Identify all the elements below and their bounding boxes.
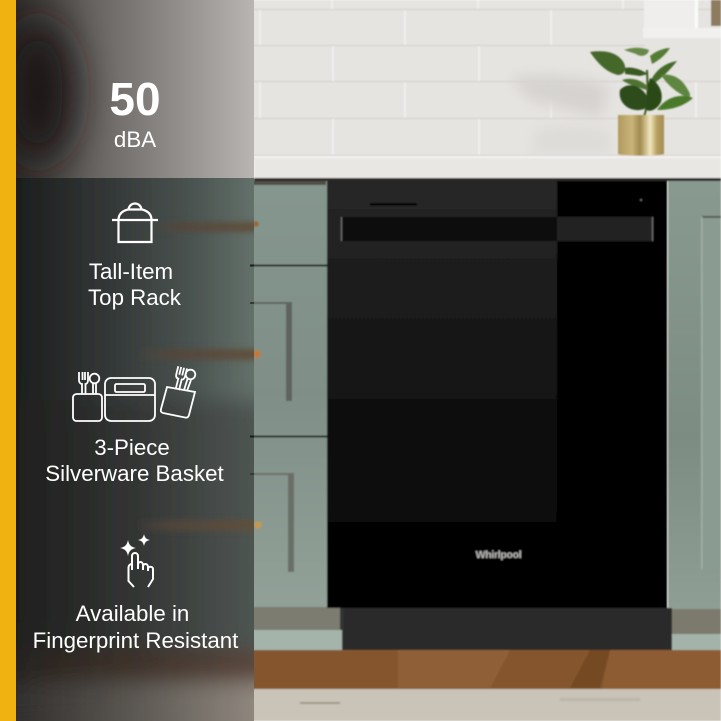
icon: three baskets xyxy=(73,366,195,421)
countertop xyxy=(254,156,721,181)
plant in brass pot xyxy=(590,48,693,156)
brand logo: Whirlpool xyxy=(476,549,522,561)
blurred handle streak lower xyxy=(135,520,258,531)
feature: tall-item top rack xyxy=(88,204,182,310)
icon: pot xyxy=(112,204,158,242)
toe kick xyxy=(344,608,672,650)
number 50: 50 xyxy=(109,73,161,125)
feature: fingerprint resistant: Fingerprint Resistant xyxy=(33,628,239,653)
black dishwasher door xyxy=(327,181,667,608)
icon: hand with sparkles xyxy=(120,534,153,587)
unit dBA: dBA xyxy=(114,127,156,152)
label: 3-Piece xyxy=(94,435,170,460)
blurred shadow blob xyxy=(0,20,76,164)
yellow accent bar xyxy=(0,0,16,721)
brass pot xyxy=(618,115,664,156)
blurred handle streak middle xyxy=(135,349,258,360)
wood floor xyxy=(250,650,721,689)
feature: noise level xyxy=(109,73,161,152)
leaves xyxy=(590,48,693,117)
translucent frosted left panel xyxy=(0,0,258,721)
feature: silverware basket xyxy=(45,366,225,486)
blurred handle streak top xyxy=(150,222,258,232)
feature: tall-item top rack: Top Rack xyxy=(88,285,182,310)
feature: silverware basket: Silverware Basket xyxy=(45,461,225,486)
tile wall xyxy=(250,0,721,160)
left cabinet drawers xyxy=(250,181,344,653)
kitchen photo background xyxy=(250,0,721,721)
right cabinet xyxy=(668,181,721,656)
feature: fingerprint resistant xyxy=(33,534,239,653)
rug xyxy=(250,689,721,721)
label: Available in xyxy=(76,601,189,626)
label: Tall-Item xyxy=(89,259,173,284)
